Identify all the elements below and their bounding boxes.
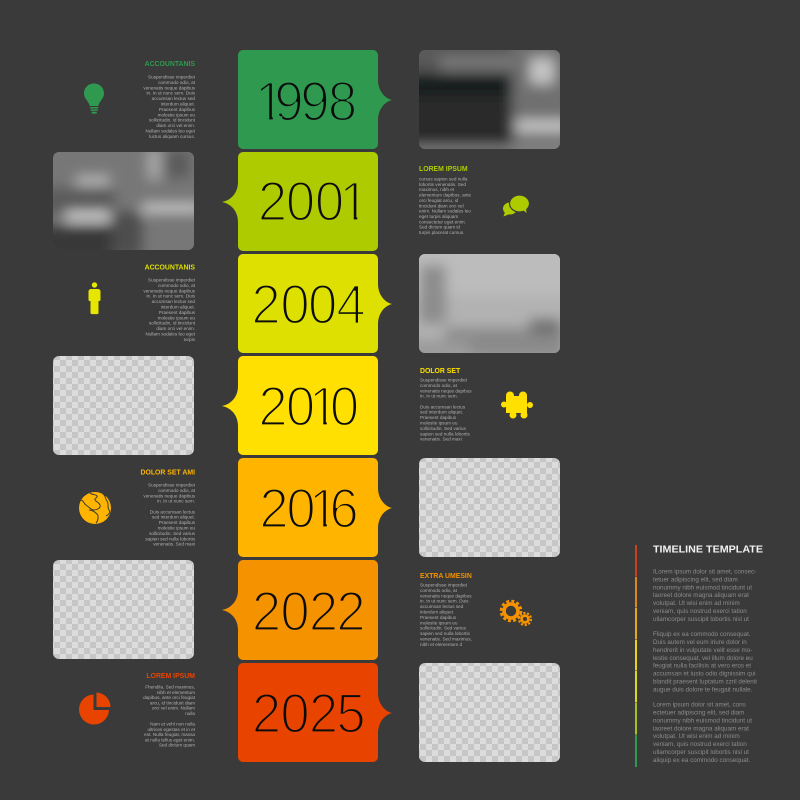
text block: 2001: orci feugiat arcu, id: [419, 198, 459, 203]
text block: 2016: Praesent dapibus: [159, 520, 196, 525]
text block: 1998: Suspendisse imperdiet: [148, 74, 196, 80]
text block: 1998: luctus aliquam cursus.: [149, 134, 195, 139]
text block: 2001: LOREM IPSUM: [419, 166, 468, 173]
text block: 2001: maximus, nibh et: [419, 187, 455, 192]
text block: 2004: molestie ipsum eu: [158, 315, 195, 320]
icon: gears: [501, 601, 531, 625]
text block: 2022: venenatis neque dapibus: [420, 593, 472, 598]
sidebar text: ILorem ipsum dolor sit amet, consec-: [653, 568, 756, 576]
sidebar text: veniam, quis nostrud exerci tation: [653, 741, 747, 748]
text block: 2016: [140, 470, 196, 547]
text block: 1998: sollicitudin, id tincidunt: [149, 118, 196, 123]
photo placeholder: checkerboard, right 2016: [419, 458, 560, 557]
text block: 1998: Praesent dapibus: [159, 107, 196, 112]
text block: 2004: interdum aliquet.: [161, 304, 195, 310]
sidebar text: aliquip ex ea commodo consequat.: [653, 757, 751, 764]
text block: 2010: in. In ut nunc sem.: [420, 394, 458, 399]
timeline block: 2004: [238, 254, 392, 353]
sidebar text: volutpat. Ut wisi enim ad minim: [653, 733, 740, 740]
sidebar text: nonummy nibh euismod tincidunt ut: [653, 717, 752, 724]
photo placeholder: checkerboard, right 2025: [419, 663, 560, 762]
text block: 2022: accumsan lectus sed: [420, 604, 464, 609]
sidebar text: Fliquip ex ea commodo consequat.: [653, 631, 751, 638]
sidebar text: volutpat. Ut wisi enim ad minim: [653, 600, 740, 607]
sidebar text: hendrerit in vulputate velit esse mo-: [653, 647, 752, 654]
text block: 2025: est. Nulla feugiat, massa: [144, 732, 195, 737]
sidebar text: nonummy nibh euismod tincidunt ut: [653, 584, 752, 591]
icon: pie chart: [79, 692, 110, 724]
sidebar text: veniam, quis nostrud exerci tation: [653, 608, 747, 615]
sidebar: colored vertical timeline bar: [635, 545, 637, 767]
text block: 2001: eget turpis aliquam: [419, 214, 458, 219]
text block: 1998: accumsan lectus sed: [152, 96, 195, 101]
text block: 2022: EXTRA UMESIN: [420, 573, 472, 580]
photo: dark blurred placeholder, 1998: [419, 50, 560, 149]
text block: 2010: Suspendisse imperdiet: [420, 378, 468, 382]
text block: 2010: sollicitudin. Sed varius: [420, 426, 467, 431]
timeline block: 2001: 2001: [258, 170, 369, 233]
text block: 2022: sollicitudin. Sed varius: [420, 626, 467, 631]
text block: 2025: dapibus, ante orci feugiat: [143, 695, 196, 700]
text block: 2022: molestie ipsum eu: [420, 620, 458, 625]
text block: 2016: DOLOR SET AMI: [140, 470, 195, 476]
sidebar text: ullamcorper suscipit lobortis nisl ut: [653, 616, 749, 623]
sidebar text: ectetuer adipiscing elit, sed diam: [653, 710, 744, 716]
text block: 1998: in. In ut nunc sem. Duis: [146, 91, 196, 96]
text block: 2010: DOLOR SET: [420, 368, 461, 375]
text block: 2001: lobortis venenatis. Sed: [419, 182, 466, 187]
text block: 2022: Suspendisse imperdiet: [420, 582, 468, 588]
text block: 2004: commodo odio, at: [158, 283, 196, 288]
timeline block: 1998: 1998: [255, 70, 357, 133]
text block: 1998: venenatis neque dapibus: [143, 85, 196, 90]
text block: 2004: in. In ut nunc sem. Duis: [146, 294, 196, 299]
photo placeholder: checkerboard, left 2010: [53, 356, 194, 455]
text block: 2016: venenatis neque dapibus: [143, 493, 196, 498]
text block: 2010: molestie ipsum eu: [420, 420, 458, 426]
text block: 2025: at nulla tellus eget enim.: [145, 737, 195, 742]
text block: 2016: in. In ut nunc sem.: [157, 499, 195, 504]
text block: 2004: ACCOUNTANIS: [145, 264, 195, 272]
sidebar heading: TIMELINE TEMPLATE: [653, 544, 763, 556]
text block: 2022: Praesent dapibus: [420, 615, 457, 620]
icon: globe: [79, 492, 111, 524]
timeline block: 2004: 2004: [251, 273, 366, 336]
sidebar text: Lorem ipsum dolor sit amet, cons: [653, 702, 746, 709]
text block: 2001: enim. Nullam sodales leo: [419, 209, 471, 214]
text block: 1998: molestie ipsum eu: [158, 112, 195, 117]
text block: 2004: sollicitudin, id tincidunt: [149, 321, 196, 326]
sidebar text: laoreet dolore magna aliquam erat: [653, 725, 749, 732]
text block: 2022: sapien sed nulla lobortis: [420, 631, 470, 636]
timeline block: 2010: [222, 356, 378, 455]
text block: 2025: Sed dictum quam: [159, 743, 195, 748]
text block: 2022: [420, 573, 472, 647]
sidebar text: feugiat nulla facilisis at vero eros et: [653, 663, 751, 670]
text block: 1998: [143, 61, 196, 139]
text block: 2016: sapien sed nulla lobortis: [145, 536, 196, 541]
sidebar text: accumsan et iusto odio dignissim qui: [653, 671, 756, 678]
timeline block: 1998: [238, 50, 392, 149]
timeline block: 2016: 2016: [259, 477, 359, 540]
text block: 2001: turpis placerat cursus.: [419, 230, 464, 235]
text block: 1998: Nullam sodales leo eget: [145, 128, 196, 134]
text block: 2010: venenatis. Sed maxi: [420, 437, 462, 442]
text block: 2010: sapien sed nulla lobortis: [420, 431, 470, 436]
text block: 2025: orci vel enim. Nullam: [152, 706, 195, 711]
photo: light blurred placeholder, 2004: [419, 254, 560, 353]
text block: 2025: nulla: [185, 711, 195, 716]
text block: 2016: sollicitudin. Sed varius: [149, 531, 196, 536]
text block: 2025: [143, 673, 196, 748]
text block: 2022: commodo odio, at: [420, 588, 458, 593]
text block: 1998: interdum aliquet.: [161, 102, 195, 106]
sidebar text: Duis autem vel eum iriure dolor in: [653, 639, 747, 646]
text block: 2016: Duis accumsan lectus: [150, 509, 196, 514]
sidebar text: laoreet dolore magna aliquam erat: [653, 592, 749, 599]
text block: 2025: nibh et elementum: [157, 690, 195, 695]
timeline block: 2016: [238, 458, 392, 557]
timeline block: 2010: 2010: [258, 375, 359, 438]
icon: light bulb: [84, 84, 104, 114]
icon: person: [88, 282, 101, 314]
text block: 2004: venenatis neque dapibus: [143, 288, 196, 293]
timeline block: 2025: 2025: [252, 682, 366, 745]
text block: 2022: venenatis. Sed maximus,: [420, 636, 472, 642]
text block: 2010: [420, 368, 472, 442]
text block: 2004: Praesent dapibus: [159, 310, 196, 315]
text block: 2004: Suspendisse imperdiet: [148, 278, 196, 282]
text block: 2016: Suspendisse imperdiet: [148, 482, 196, 488]
text block: 2010: Duis accumsan lectus: [420, 404, 466, 409]
timeline block: 2022: 2022: [252, 580, 366, 643]
timeline block: 2001: [222, 152, 378, 251]
text block: 2001: cursus sapien sed nulla: [419, 176, 468, 182]
photo: grey blurred placeholder, 2001: [53, 152, 194, 250]
text block: 2016: commodo odio, at: [158, 488, 196, 493]
text block: 2010: Praesent dapibus: [420, 415, 457, 420]
text block: 2016: sed interdum aliquet.: [152, 515, 195, 520]
text block: 2010: sed interdum aliquet.: [420, 410, 463, 415]
text block: 2001: [419, 166, 472, 235]
text block: 2001: consectetur eget enim.: [419, 219, 466, 224]
text block: 2025: arcu, id tincidunt diam: [150, 700, 195, 705]
text block: 2004: accumsan lectus sed: [152, 299, 195, 304]
text block: 2004: [143, 264, 196, 342]
timeline block: 2025: [238, 663, 392, 762]
sidebar text: blandit praesent luptatum zzril delenit: [653, 678, 757, 686]
text block: 2022: in. In ut nunc sem. Duis: [420, 599, 469, 604]
text block: 2016: venenatis. Sed maxi: [153, 542, 195, 547]
text block: 2025: LOREM IPSUM: [146, 673, 195, 680]
timeline block: 2022: [222, 560, 378, 660]
text block: 2001: elementum dapibus, ante: [419, 193, 472, 198]
sidebar text: lestie consequat, vel illum dolore eu: [653, 655, 753, 662]
text block: 2004: diam orci vel enim.: [156, 326, 195, 331]
icon: chat bubbles: [503, 195, 530, 216]
text block: 2016: molestie ipsum eu: [158, 526, 195, 530]
photo placeholder: checkerboard, left 2022: [53, 560, 194, 659]
text block: 2001: Sed dictum quam id: [419, 225, 460, 230]
text block: 1998: ACCOUNTANIS: [145, 61, 195, 68]
sidebar text: tetuer adipiscing elit, sed diam: [653, 576, 738, 583]
text block: 2022: nibh et elementum d: [420, 642, 462, 647]
text block: 2004: Nullam sodales leo eget: [145, 332, 196, 336]
text block: 2001: tincidunt diam orci vel: [419, 203, 464, 208]
sidebar text: ullamcorper suscipit lobortis nisl ut: [653, 749, 749, 756]
sidebar text: augue duis dolore te feugait nullale.: [653, 686, 753, 693]
text block: 2010: venenatis neque dapibus: [420, 388, 472, 393]
text block: 2025: Nam et vehl non nulla: [150, 722, 195, 726]
text block: 2025: Fhendila. Sed maximus,: [145, 684, 195, 690]
text block: 1998: commodo odio, at: [158, 80, 196, 85]
text block: 1998: diam orci vel enim.: [156, 123, 195, 128]
text block: 2004: turpis: [184, 337, 196, 342]
icon: puzzle piece: [501, 392, 533, 418]
text block: 2010: commodo odio, at: [420, 383, 458, 388]
text block: 2022: interdum aliquet.: [420, 610, 454, 614]
text block: 2025: ultrices egestas et in et: [148, 727, 196, 732]
